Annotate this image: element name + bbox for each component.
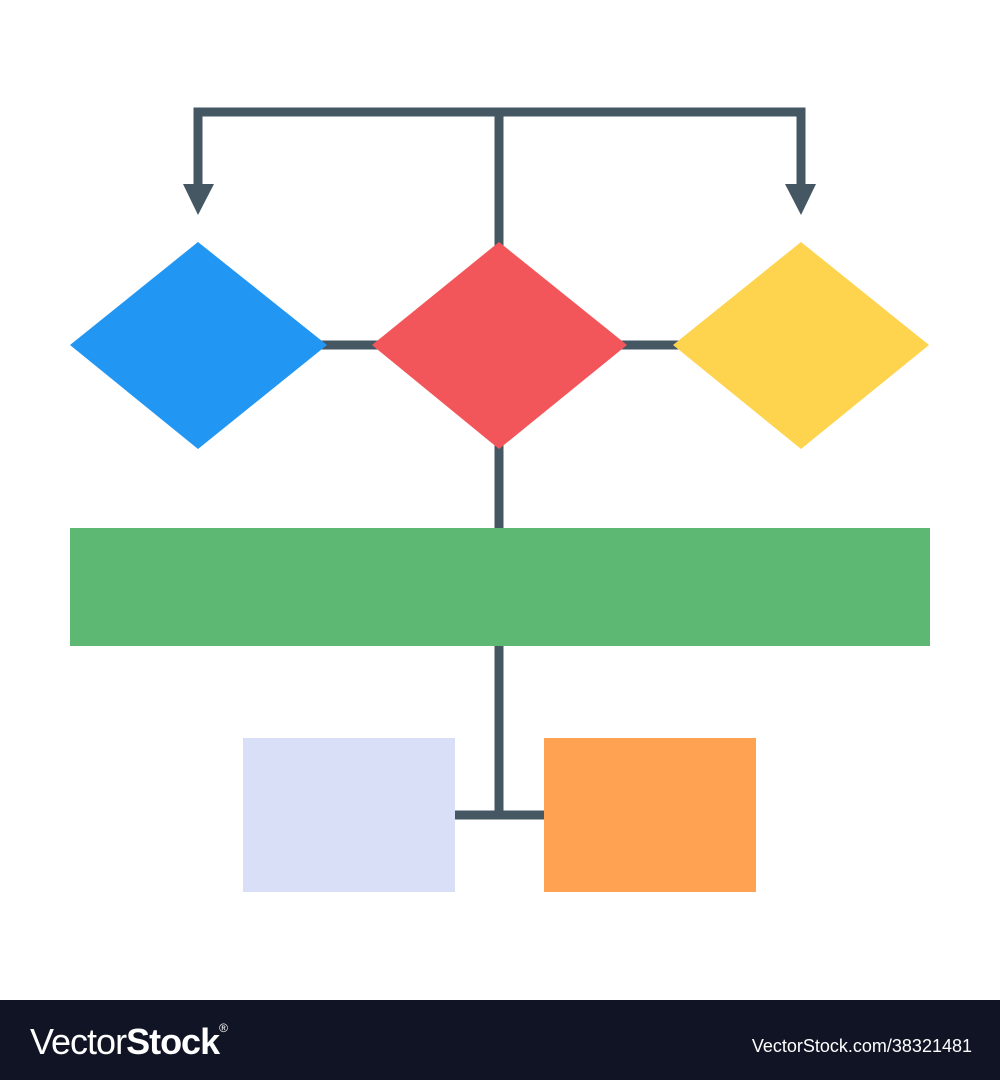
lavender box [243,738,455,892]
arrow: left [183,184,214,215]
footer logo: VectorStock [30,1021,219,1062]
diamond: yellow [673,242,929,449]
footer bar [0,1000,1000,1080]
footer logo: ® [219,1021,228,1035]
footer url: VectorStock.com/38321481 [752,1036,972,1056]
green bar [70,528,930,646]
arrow: right [785,184,816,215]
connector lines [198,112,801,815]
diamond: red [372,242,627,449]
orange box [544,738,756,892]
diamond: blue [70,242,327,449]
